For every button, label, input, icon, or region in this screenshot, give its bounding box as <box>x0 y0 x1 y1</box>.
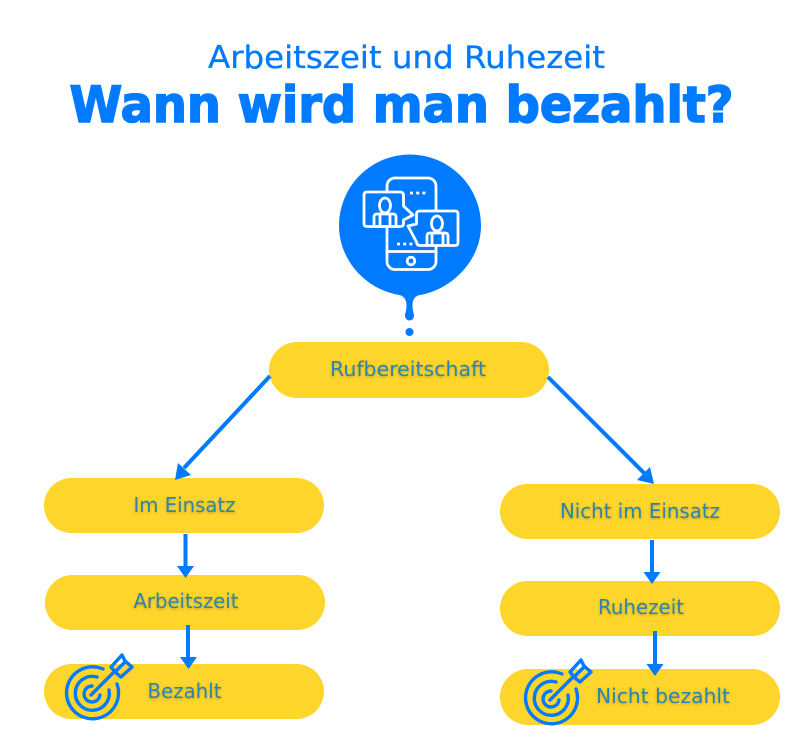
node: Arbeitszeit <box>45 575 325 630</box>
subtitle: Arbeitszeit und Ruhezeit <box>208 40 605 76</box>
right speech bubble <box>408 211 458 246</box>
arrow: Nicht im Einsatz to Ruhezeit <box>644 540 660 584</box>
node: Nicht im Einsatz <box>500 484 780 539</box>
left speech bubble <box>364 192 413 226</box>
arrow: Im Einsatz to Arbeitszeit <box>177 534 194 578</box>
icon: phone chat in blue drop <box>339 154 481 336</box>
main heading: Wann wird man bezahlt? <box>70 76 734 134</box>
node: Nicht bezahlt <box>500 669 780 725</box>
node: Ruhezeit <box>500 581 780 636</box>
title <box>70 40 734 134</box>
phone <box>387 178 436 270</box>
arrow: Ruhezeit to Nicht bezahlt <box>646 631 664 676</box>
arrow: Rufbereitschaft to Im Einsatz <box>175 376 270 480</box>
node: Rufbereitschaft: Rufbereitschaft <box>330 357 486 381</box>
icon: target right <box>526 660 591 724</box>
node: Ruhezeit: Ruhezeit <box>598 595 684 619</box>
node: Rufbereitschaft <box>269 342 549 398</box>
node: Im Einsatz <box>44 478 324 533</box>
arrow: Arbeitszeit to Bezahlt <box>180 625 197 669</box>
node: Nicht bezahlt: Nicht bezahlt <box>596 684 730 708</box>
node: Im Einsatz: Im Einsatz <box>134 493 236 517</box>
icon: target left <box>67 655 132 719</box>
node: Bezahlt <box>44 664 324 719</box>
node: Bezahlt: Bezahlt <box>148 679 222 703</box>
arrow: Rufbereitschaft to Nicht im Einsatz <box>548 377 654 484</box>
node: Arbeitszeit: Arbeitszeit <box>134 589 238 613</box>
node: Nicht im Einsatz: Nicht im Einsatz <box>560 499 720 523</box>
